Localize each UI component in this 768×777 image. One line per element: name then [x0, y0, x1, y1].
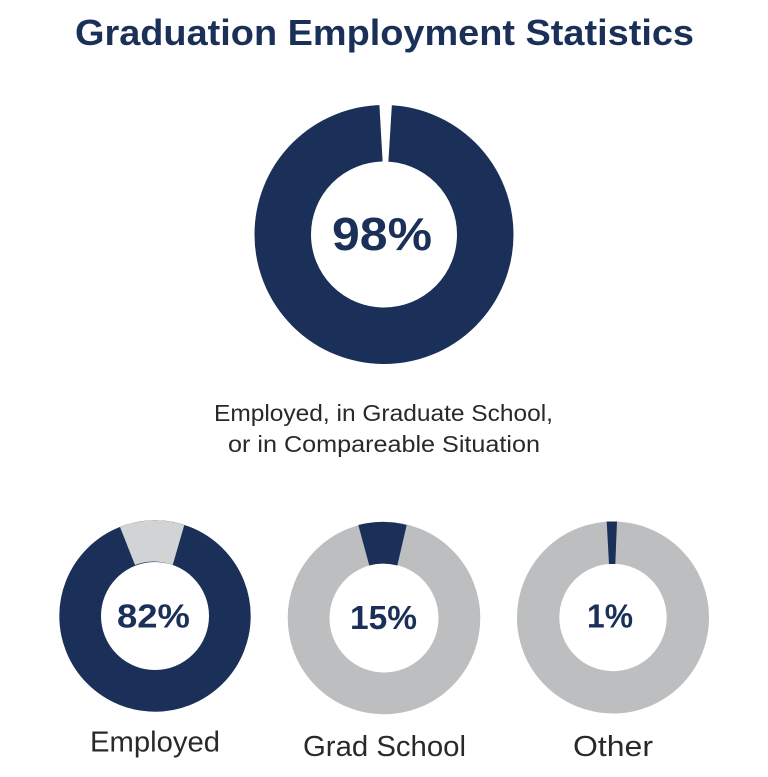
- main percentage: 98%: [332, 208, 432, 260]
- donut: employed 82%: [80, 520, 230, 691]
- label: employed: Employed: [90, 726, 220, 758]
- percentage: 15%: [350, 599, 417, 636]
- donut: other 1%: [538, 522, 688, 692]
- main donut caption: [214, 400, 553, 457]
- main donut caption: or in Compareable Situation: [228, 431, 540, 457]
- donut: grad school 15%: [309, 522, 459, 693]
- title: Graduation Employment Statistics: [75, 12, 694, 53]
- percentage: 1%: [587, 598, 633, 634]
- label: grad school: Grad School: [303, 731, 466, 763]
- label: other: Other: [573, 731, 653, 763]
- main donut: 98%: [283, 103, 485, 336]
- percentage: 82%: [117, 598, 190, 634]
- main donut caption: Employed, in Graduate School,: [214, 400, 553, 426]
